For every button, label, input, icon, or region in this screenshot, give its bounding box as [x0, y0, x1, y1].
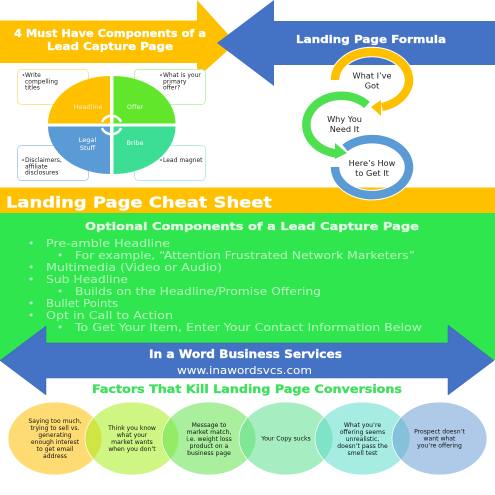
circle: message to market match: i.e. weight loss [186, 436, 232, 443]
heading: 4 must have components: Lead Capture Page [47, 41, 173, 53]
list: optional components: Opt in Call to Action [46, 310, 173, 322]
panel: optional components [0, 213, 495, 360]
box: primary offer: offer? [163, 84, 180, 92]
circle: saying too much: Saying too much, [28, 418, 82, 425]
list: optional components: Multimedia (Video or Audio) [46, 262, 222, 274]
box: disclaimers: disclosures [25, 170, 58, 176]
arrow: yellow heading [0, 0, 236, 78]
circle: saying too much [8, 402, 102, 475]
circle: message to market match [162, 402, 256, 475]
list: optional components [28, 238, 422, 334]
circle: message to market match: product on a [190, 443, 229, 450]
circle: your copy sucks [239, 402, 333, 475]
box: write compelling titles: Write [25, 72, 41, 79]
venn: kill factors [8, 402, 487, 475]
box: lead magnet: Lead magnet [163, 157, 203, 164]
list: optional components: • [57, 250, 63, 262]
circle: message to market match: Message to [192, 422, 227, 429]
arc: why you need it: Need It [330, 124, 360, 134]
pie: legal stuff quadrant: Legal [79, 136, 96, 144]
circle: seems unrealistic: smell test [348, 450, 378, 457]
arc: here's how to get it [335, 139, 409, 195]
pie: headline quadrant [48, 76, 110, 124]
arc: what I've got: What I’ve [352, 70, 392, 80]
list: optional components: Builds on the Headline/Promise Offering [75, 286, 321, 298]
arrow: blue heading [217, 0, 495, 86]
pie: legal stuff quadrant: Stuff [80, 144, 96, 152]
pie: legal stuff quadrant [48, 126, 110, 174]
pie: offer quadrant [114, 76, 176, 124]
heading: landing page formula: Landing Page Formula [296, 34, 446, 46]
diagram: landing page formula cycle [306, 52, 409, 195]
arc: what I've got [335, 52, 409, 116]
circle: saying too much: enough interest [31, 439, 80, 446]
box: disclaimers: affiliate [25, 164, 48, 170]
pie: bribe quadrant: Bribe [126, 139, 144, 147]
box: lead magnet [134, 146, 206, 180]
circle: think you know [85, 402, 179, 475]
list: optional components: • [28, 238, 34, 250]
text: website: www.inawordsvcs.com [177, 365, 312, 377]
box: disclaimers: Disclaimers, [25, 157, 62, 164]
heading: optional components: Optional Components of a Lead Capture Page [85, 220, 419, 233]
list: optional components: Bullet Points [46, 298, 118, 310]
circle: saying too much: generating [38, 432, 72, 439]
circle: seems unrealistic: offering seems [340, 429, 385, 436]
circle: your copy sucks: Your Copy sucks [260, 436, 311, 442]
heading: 4 must have components: 4 Must Have Components of a [14, 28, 206, 40]
circle: seems unrealistic: What you’re [344, 422, 381, 429]
circle: think you know: what your [117, 432, 148, 439]
box: primary offer: primary [163, 78, 187, 86]
arc: why you need it [306, 96, 367, 159]
circle: message to market match: market match, [187, 429, 231, 436]
heading: factors that kill conversions: Factors That Kill Landing Page Conversions [92, 382, 402, 396]
list: optional components: • [28, 298, 34, 310]
list: optional components: • [57, 286, 63, 298]
box: disclaimers [18, 146, 88, 180]
list: optional components: • [28, 262, 34, 274]
box: write compelling titles [18, 70, 88, 104]
box: write compelling titles: titles [25, 84, 40, 92]
circle: prospect doesn't want [392, 402, 487, 475]
circle: saying too much: trying to sell vs. [31, 425, 79, 432]
list: optional components: To Get Your Item, Enter Your Contact Information Below [74, 322, 422, 334]
circle: think you know: Think you know [107, 425, 156, 432]
circle: seems unrealistic: unrealistic, [346, 436, 379, 443]
box: write compelling titles: compelling [25, 78, 58, 86]
circle: think you know: when you don’t [108, 446, 156, 453]
heading: landing page cheat sheet: Landing Page Cheat Sheet [6, 194, 273, 212]
list: optional components: Pre-amble Headline [46, 238, 170, 250]
icon: center cycle ring [102, 116, 121, 134]
band: cheat sheet [0, 188, 495, 214]
list: optional components: For example, “Attention Frustrated Network Marketers” [75, 250, 415, 262]
circle: seems unrealistic: doesn’t pass the [337, 443, 388, 450]
circle: think you know: market wants [111, 439, 153, 446]
arc: why you need it: Why You [327, 114, 362, 124]
heading: 4 must have components [14, 28, 206, 53]
text: company name: In a Word Business Services [149, 347, 342, 361]
pie: headline quadrant: Headline [74, 103, 102, 111]
circle: saying too much: to get email [37, 446, 74, 453]
arc: here's how to get it: to Get It [355, 168, 390, 178]
circle: message to market match: business page [187, 450, 231, 457]
box: primary offer [134, 70, 206, 104]
panel: four components [18, 70, 206, 180]
circle: prospect doesn't want: Prospect doesn’t [414, 428, 466, 436]
pie: bribe quadrant [114, 126, 176, 174]
arrow: double-headed company banner [0, 325, 494, 395]
list: optional components: • [28, 274, 34, 286]
circle: prospect doesn't want: you’re offering [417, 442, 462, 450]
list: optional components: • [57, 322, 63, 334]
circle: seems unrealistic [315, 402, 410, 475]
arc: what I've got: Got [365, 80, 380, 90]
circle: saying too much: address [43, 453, 67, 460]
list: optional components: Sub Headline [46, 274, 128, 286]
arc: here's how to get it: Here’s How [349, 158, 396, 168]
circle: prospect doesn't want: want what [424, 436, 456, 442]
pie: offer quadrant: Offer [127, 103, 143, 111]
box: primary offer: What is your [163, 72, 201, 79]
list: optional components: • [28, 310, 34, 322]
